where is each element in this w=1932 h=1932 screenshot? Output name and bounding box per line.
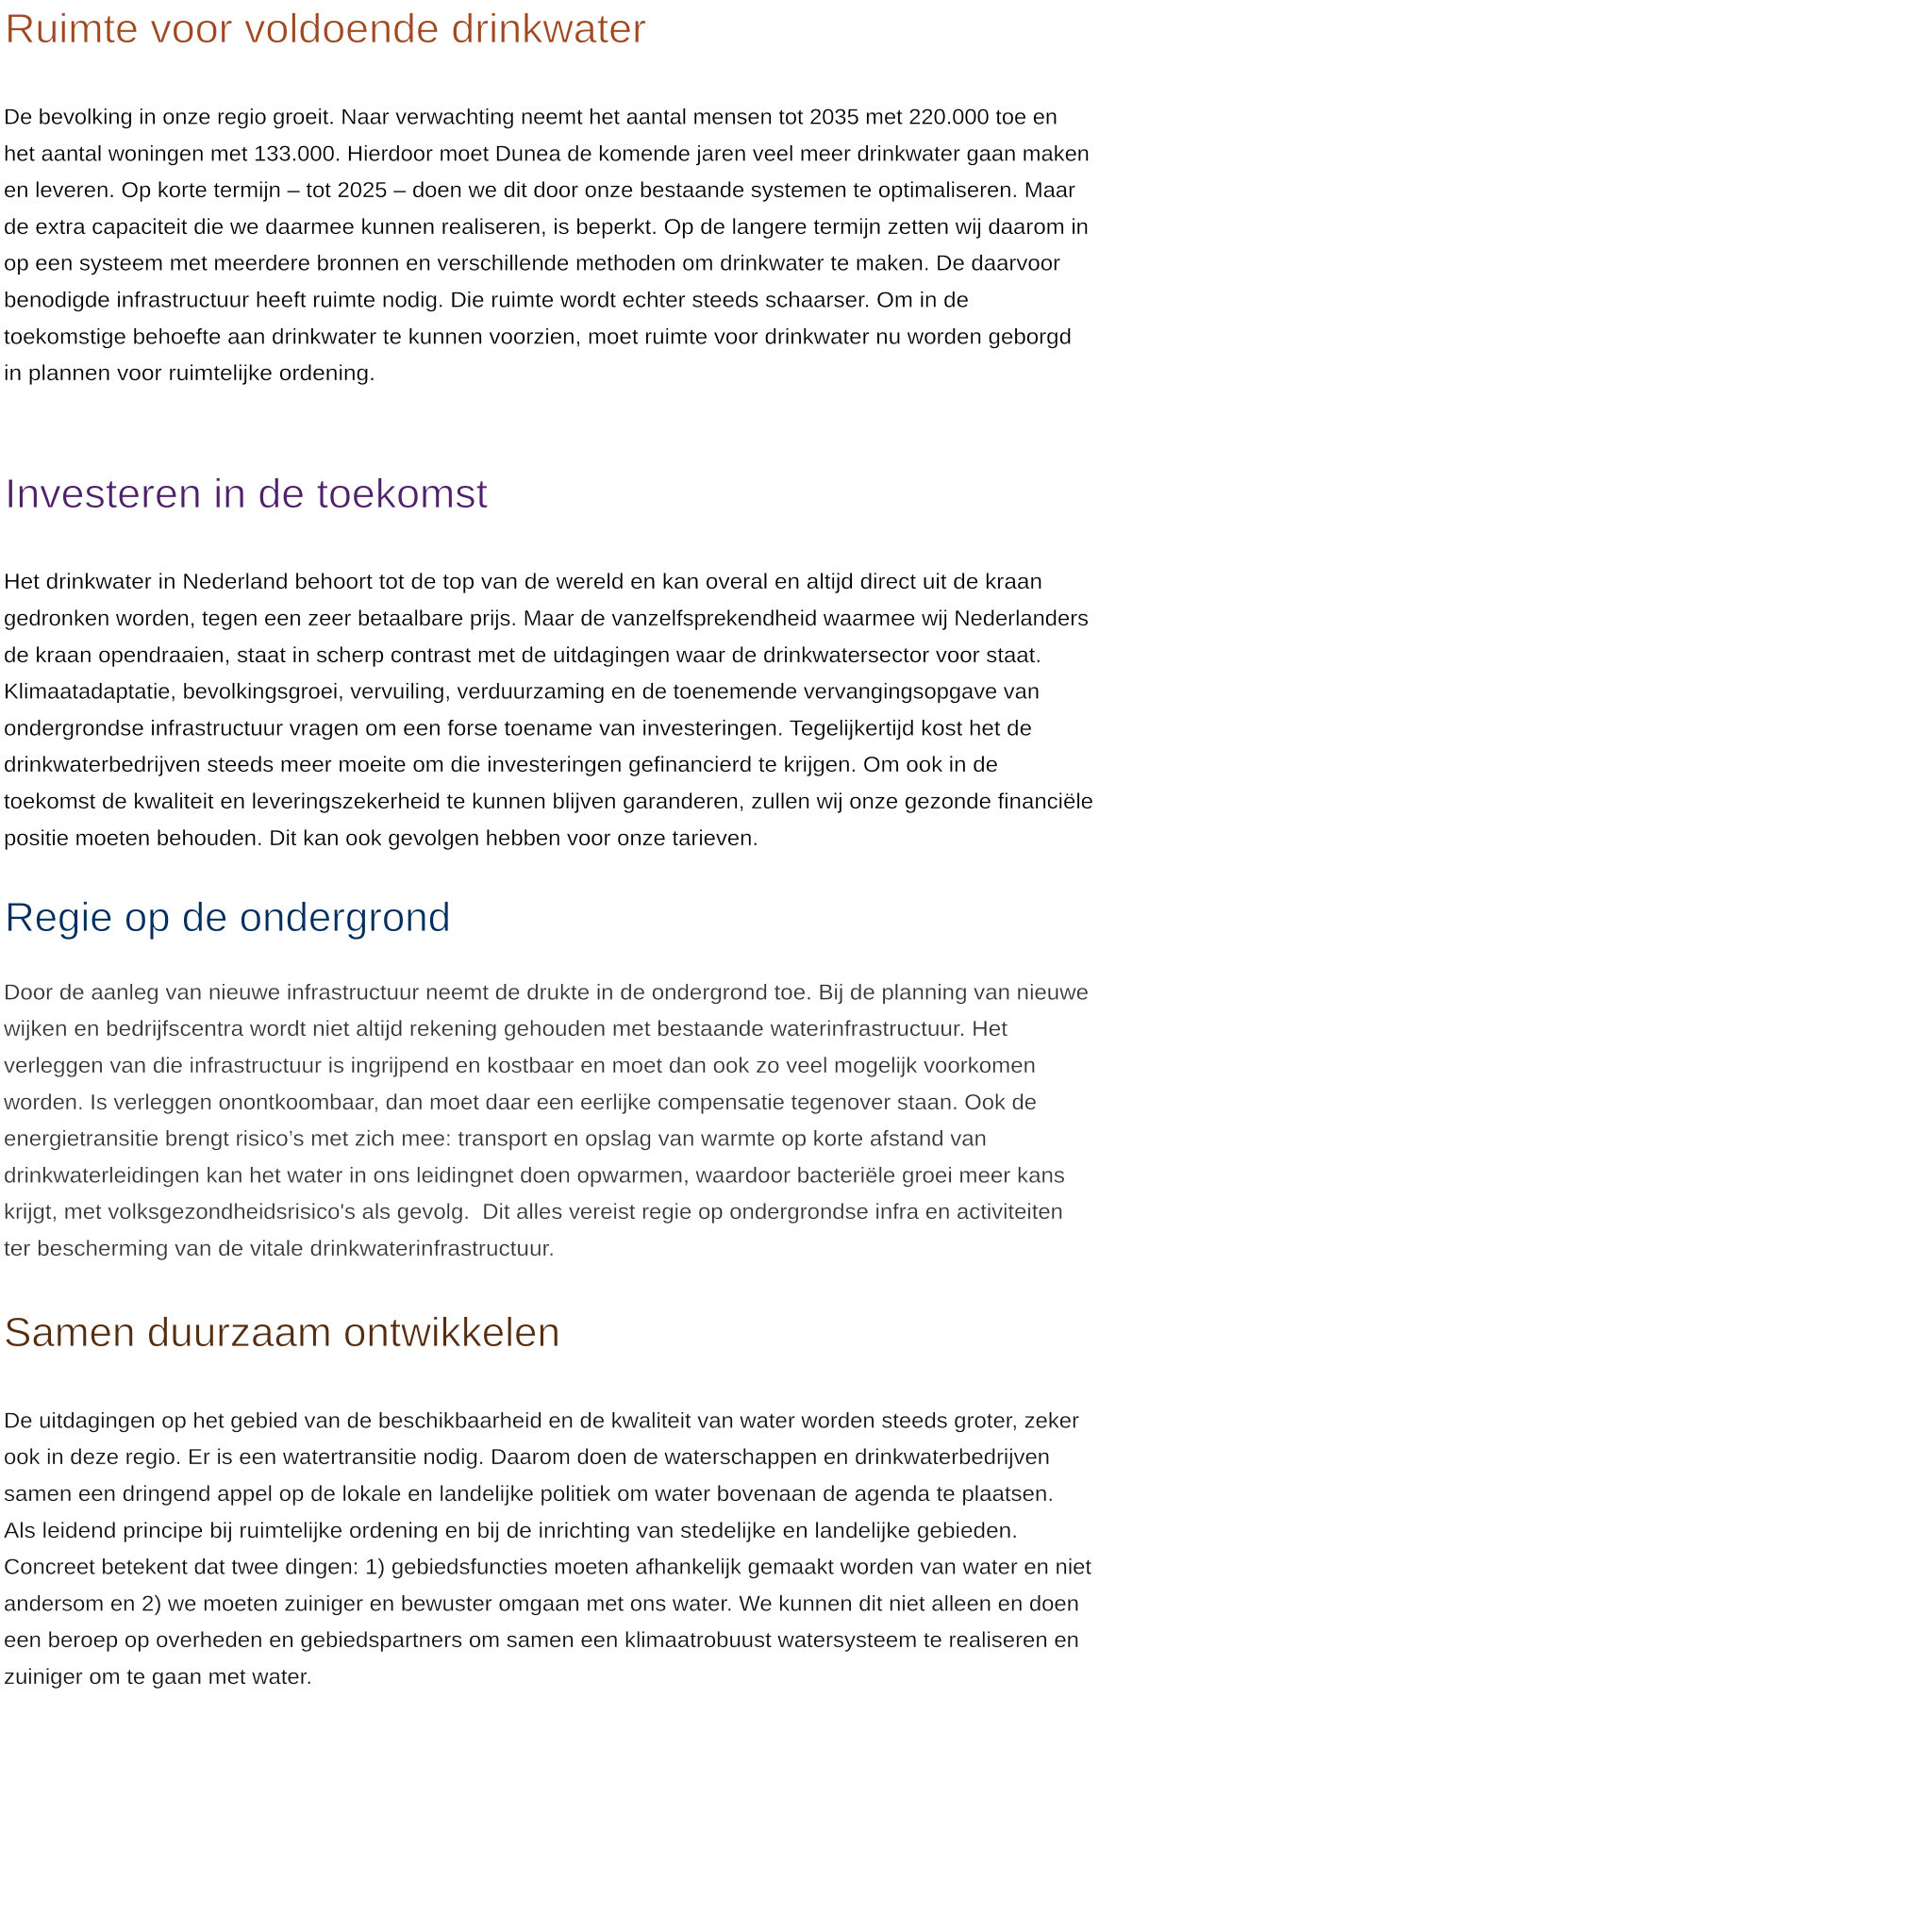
text block: Investeren in de toekomst: ondergrondse infrastructuur vragen om een forse toename van investeringen. Tegelijkertijd kost het de [4,715,1032,740]
text block: Ruimte voor voldoende drinkwater: en leveren. Op korte termijn – tot 2025 – doen we dit door onze bestaande systemen te optimaliseren. Maar [4,177,1075,202]
text block: Regie op de ondergrond: verleggen van die infrastructuur is ingrijpend en kostbaar en moet dan ook zo veel mogelijk voorkomen [4,1053,1036,1077]
text block: Ruimte voor voldoende drinkwater: op een systeem met meerdere bronnen en verschillende methoden om drinkwater te maken. De daarvoor [4,251,1060,275]
text block: Samen duurzaam ontwikkelen: zuiniger om te gaan met water. [4,1664,312,1689]
text block: Ruimte voor voldoende drinkwater: het aantal woningen met 133.000. Hierdoor moet Dunea de komende jaren veel meer drinkwater gaan maken [4,141,1090,165]
text block: Samen duurzaam ontwikkelen [4,1407,1092,1689]
text block: Regie op de ondergrond: worden. Is verleggen onontkoombaar, dan moet daar een eerlijke compensatie tegenover staan. Ook de [3,1090,1037,1114]
text block: Samen duurzaam ontwikkelen: een beroep op overheden en gebiedspartners om samen een klimaatrobuust watersysteem te realiseren en [4,1627,1079,1652]
text block: Investeren in de toekomst: toekomst de kwaliteit en leveringszekerheid te kunnen blijven garanderen, zullen wij onze gezonde financiële [4,789,1093,813]
heading: Regie op de ondergrond: Regie op de ondergrond [5,895,451,941]
text block: Ruimte voor voldoende drinkwater [4,104,1090,385]
text block: Ruimte voor voldoende drinkwater: de extra capaciteit die we daarmee kunnen realiseren, is beperkt. Op de langere termijn zetten wij daarom in [4,214,1089,239]
text block: Samen duurzaam ontwikkelen: Concreet betekent dat twee dingen: 1) gebiedsfuncties moeten afhankelijk gemaakt worden van water en niet [4,1555,1092,1579]
heading: Investeren in de toekomst: Investeren in de toekomst [5,472,488,517]
text block: Samen duurzaam ontwikkelen: samen een dringend appel op de lokale en landelijke politiek om water bovenaan de agenda te plaatsen. [4,1481,1054,1506]
text block: Ruimte voor voldoende drinkwater: De bevolking in onze regio groeit. Naar verwachting neemt het aantal mensen tot 2035 met 220.000 toe en [4,105,1058,129]
text block: Regie op de ondergrond: wijken en bedrijfscentra wordt niet altijd rekening gehouden met bestaande waterinfrastructuur. Het [3,1016,1008,1041]
text block: Samen duurzaam ontwikkelen: andersom en 2) we moeten zuiniger en bewuster omgaan met ons water. We kunnen dit niet alleen en doen [4,1591,1079,1615]
text block: Samen duurzaam ontwikkelen: ook in deze regio. Er is een watertransitie nodig. Daarom doen de waterschappen en drinkwaterbedrijven [4,1444,1050,1469]
text block: Investeren in de toekomst: Het drinkwater in Nederland behoort tot de top van de wereld en kan overal en altijd direct uit de kraan [4,569,1042,593]
text block: Regie op de ondergrond: drinkwaterleidingen kan het water in ons leidingnet doen opwarmen, waardoor bacteriële groei meer kans [4,1162,1065,1187]
text block: Regie op de ondergrond: ter bescherming van de vitale drinkwaterinfrastructuur. [4,1236,555,1260]
text block: Ruimte voor voldoende drinkwater: in plannen voor ruimtelijke ordening. [4,360,375,385]
text block: Investeren in de toekomst: gedronken worden, tegen een zeer betaalbare prijs. Maar de vanzelfsprekendheid waarmee wij Nederlanders [4,606,1089,630]
text block: Regie op de ondergrond: Door de aanleg van nieuwe infrastructuur neemt de drukte in de ondergrond toe. Bij de planning van nieuwe [4,979,1089,1004]
heading: Samen duurzaam ontwikkelen: Samen duurzaam ontwikkelen [4,1310,560,1356]
text block: Investeren in de toekomst [4,569,1093,850]
heading: Ruimte voor voldoende drinkwater: Ruimte voor voldoende drinkwater [5,7,646,52]
text block: Samen duurzaam ontwikkelen: Als leidend principe bij ruimtelijke ordening en bij de inrichting van stedelijke en landelijke gebieden. [4,1518,1018,1542]
text block: Regie op de ondergrond [3,979,1089,1260]
text block: Investeren in de toekomst: drinkwaterbedrijven steeds meer moeite om die investeringen gefinancierd te krijgen. Om ook in de [4,752,998,776]
text block: Investeren in de toekomst: Klimaatadaptatie, bevolkingsgroei, vervuiling, verduurzaming en de toenemende vervangingsopgave van [4,679,1040,704]
text block: Samen duurzaam ontwikkelen: De uitdagingen op het gebied van de beschikbaarheid en de kwaliteit van water worden steeds groter, zeker [4,1407,1079,1432]
text block: Regie op de ondergrond: energietransitie brengt risico’s met zich mee: transport en opslag van warmte op korte afstand van [4,1126,987,1151]
text block: Ruimte voor voldoende drinkwater: toekomstige behoefte aan drinkwater te kunnen voorzien, moet ruimte voor drinkwater nu worden geborgd [4,324,1072,348]
text block: Investeren in de toekomst: positie moeten behouden. Dit kan ook gevolgen hebben voor onze tarieven. [4,825,758,850]
text block: Investeren in de toekomst: de kraan opendraaien, staat in scherp contrast met de uitdagingen waar de drinkwatersector voor staat. [4,642,1041,667]
text block: Regie op de ondergrond: krijgt, met volksgezondheidsrisico's als gevolg. Dit alles vereist regie op ondergrondse infra en activiteiten [4,1199,1063,1224]
text block: Ruimte voor voldoende drinkwater: benodigde infrastructuur heeft ruimte nodig. Die ruimte wordt echter steeds schaarser. Om in de [4,287,969,311]
